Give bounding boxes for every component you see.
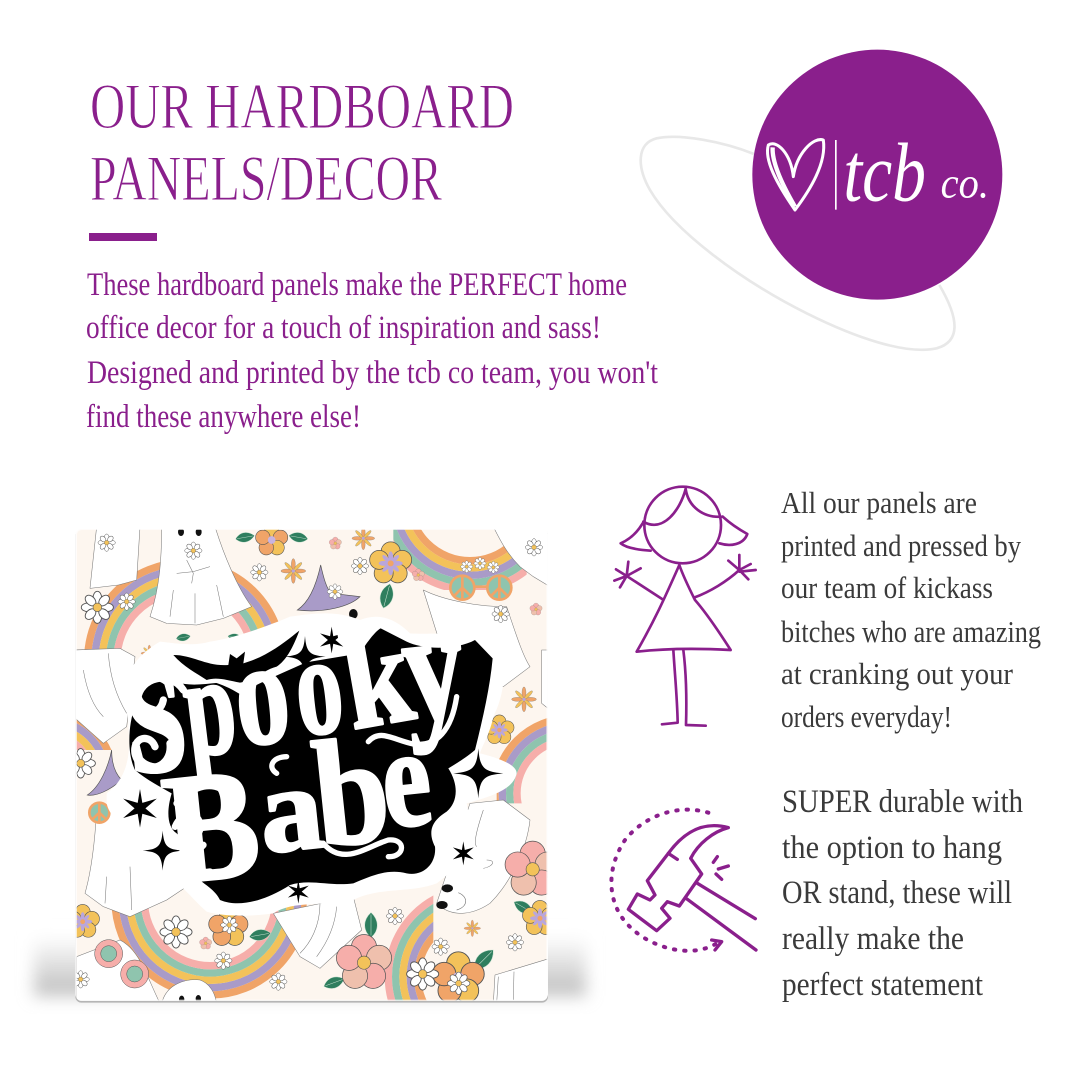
sticker lettering: Spooky: o <box>226 609 297 779</box>
sticker lettering: Spooky: o <box>287 605 350 766</box>
sticker: black shadow shape <box>129 628 493 903</box>
text block: team: All our panels are <box>781 485 977 520</box>
title: PANELS/DECOR <box>90 143 442 215</box>
text block: durability: SUPER durable with <box>782 784 1023 820</box>
text block: team <box>781 485 1041 734</box>
sticker lettering: Spooky: y <box>394 577 472 756</box>
sticker lettering: Babe: B <box>155 735 267 918</box>
title <box>90 71 514 215</box>
text block: team: printed and pressed by <box>781 528 1021 563</box>
intro text block <box>86 267 658 435</box>
sticker lettering: Spooky <box>117 577 472 807</box>
title underline bar <box>89 233 157 241</box>
logo badge <box>752 50 1002 300</box>
sticker: white gap under bat <box>170 657 307 688</box>
title: OUR HARDBOARD <box>90 71 514 143</box>
text block: durability <box>782 784 1023 1003</box>
logo badge: co. <box>941 159 989 207</box>
sticker: stars <box>123 627 503 904</box>
sticker lettering: Spooky: p <box>175 625 244 787</box>
sticker: white die-cut backing <box>107 613 517 916</box>
hammer <box>628 826 756 950</box>
flowers <box>66 524 560 1002</box>
sticker lettering: Spooky: S <box>117 636 194 807</box>
text block: team: orders everyday! <box>781 699 952 734</box>
text block: durability: OR stand, these will <box>782 875 1012 911</box>
intro text block: These hardboard panels make the PERFECT home <box>87 267 627 303</box>
sticker: bat <box>173 631 299 683</box>
panel highlight edge <box>76 529 547 1000</box>
decorative ellipse ring <box>641 137 955 350</box>
sunglasses <box>89 576 511 823</box>
intro text block: office decor for a touch of inspiration and sass! <box>86 310 601 346</box>
product panel: Spooky Babe <box>75 529 548 1003</box>
text block: durability: the option to hang <box>782 830 1002 866</box>
intro text block: find these anywhere else! <box>86 399 361 435</box>
sticker lettering: Babe <box>155 698 438 918</box>
sticker lettering: Babe: e <box>373 698 438 859</box>
logo badge: tcb <box>843 128 926 220</box>
panel floor shadow <box>34 936 586 996</box>
text block: durability: perfect statement <box>782 967 983 1003</box>
text block: durability: really make the <box>782 921 964 957</box>
sticker lettering: Babe: b <box>306 704 397 879</box>
ghosts <box>73 527 550 1003</box>
text block: team: at cranking out your <box>781 656 1014 691</box>
ghost face on sticker edge <box>436 884 466 910</box>
icon: hammer with dotted arrow <box>611 810 756 951</box>
text block: team: our team of kickass <box>781 570 993 605</box>
intro text block: Designed and printed by the tcb co team, you won't <box>87 355 658 391</box>
witch hats <box>297 565 360 611</box>
icon: stick figure girl <box>614 487 756 726</box>
sticker lettering swashes <box>135 678 457 872</box>
sticker lettering: Babe: a <box>252 739 329 879</box>
rainbows <box>76 529 548 1000</box>
sticker lettering: Spooky: k <box>331 595 424 760</box>
text block: team: bitches who are amazing <box>781 614 1041 649</box>
dotted circular arrow <box>611 810 717 951</box>
